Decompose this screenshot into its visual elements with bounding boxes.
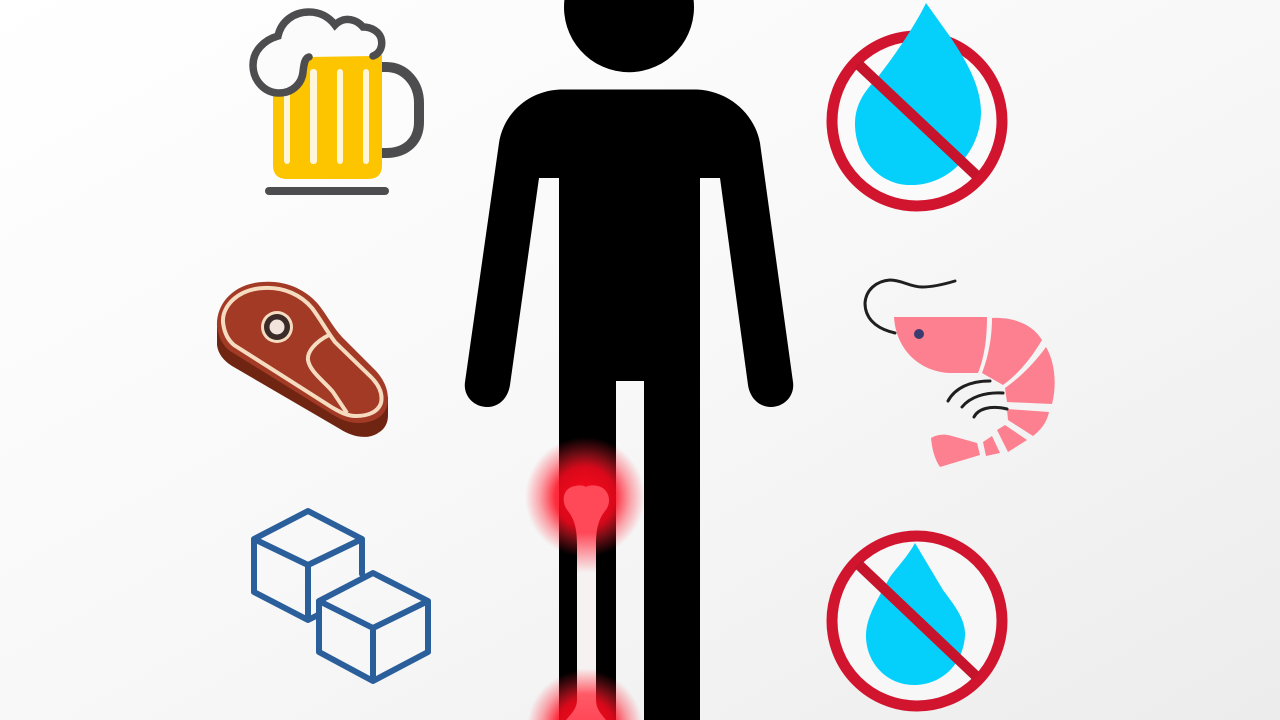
shrimp eye [914,329,924,339]
shrimp legs [948,381,1007,417]
steak bone ring [261,311,293,343]
icon: steak [217,282,388,437]
leg bone [564,485,609,720]
icon: no water large [832,3,1002,206]
inflamed upper joint glow [525,437,645,557]
person body [465,90,793,720]
icon: sugar cubes [254,511,428,681]
icon: shrimp [865,280,1055,467]
person head [564,0,694,72]
icon: beer mug [253,12,419,195]
icon: no water small [832,536,1002,706]
inflamed lower joint glow [527,670,643,720]
person silhouette [465,0,793,720]
